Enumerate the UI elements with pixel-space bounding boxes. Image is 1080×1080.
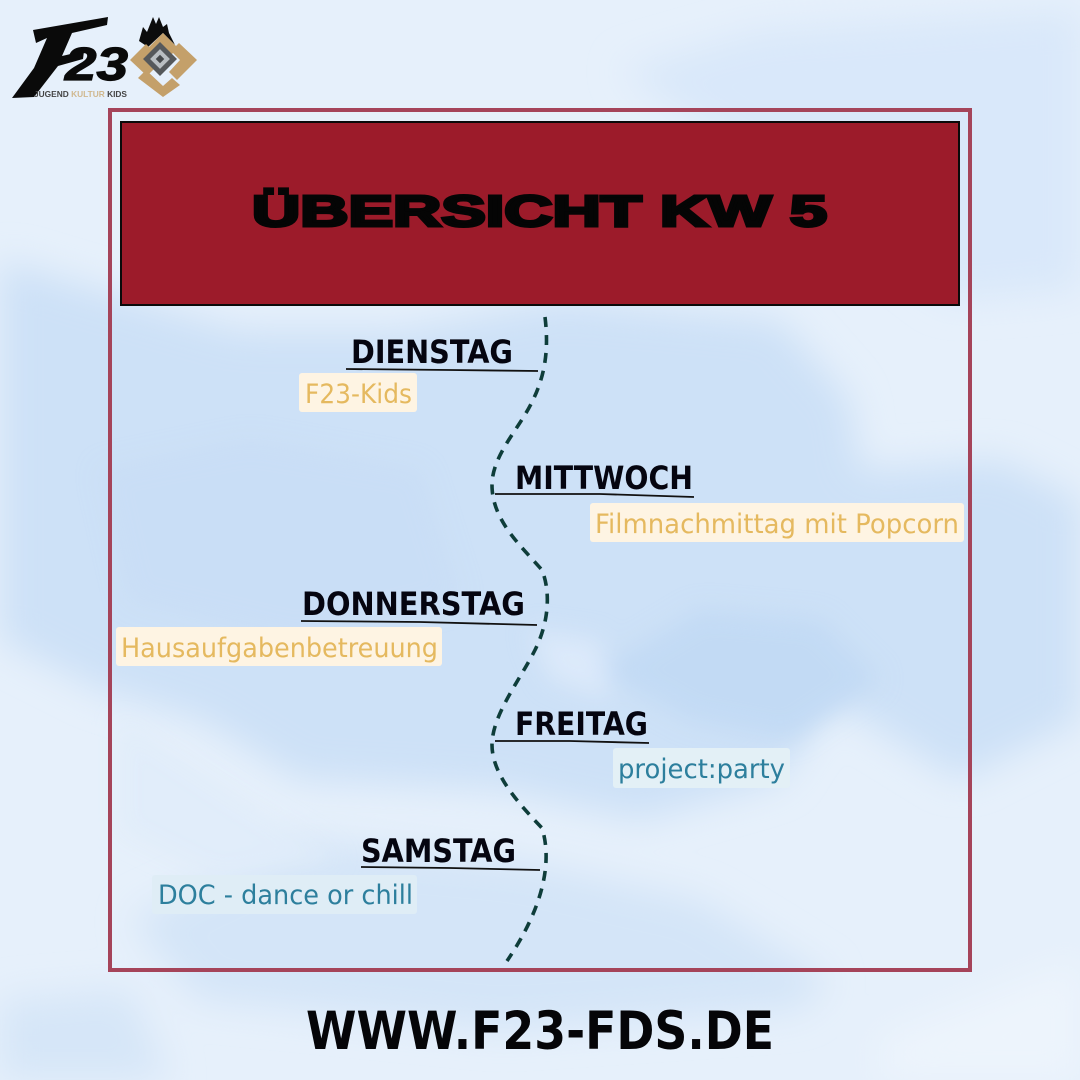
outer frame [110,110,970,970]
day heading: DIENSTAG [351,333,513,371]
entry: Donnerstag [116,585,537,666]
day heading: MITTWOCH [515,459,693,497]
connector line [495,741,649,743]
entry: Freitag [495,705,790,788]
entry: Dienstag [299,333,538,412]
logo numerals 23: 23 [64,38,129,90]
activity label: Filmnachmittag mit Popcorn [595,509,959,540]
logo: F23 Jugend Kultur Kids [12,17,197,99]
title: ÜBERSICHT KW 5 [252,187,827,236]
activity label: DOC - dance or chill [158,880,413,911]
logo tagline: JUGEND KULTUR KIDS [34,89,127,99]
day heading: FREITAG [515,705,648,743]
logo brush mark F [12,17,108,98]
day heading: DONNERSTAG [302,585,525,623]
header banner [121,122,959,305]
connector line [361,867,540,870]
activity label: F23-Kids [305,379,412,410]
logo emblem diamond [130,17,197,97]
connector line [346,369,538,371]
connector line [495,494,694,497]
activity label: Hausaufgabenbetreuung [121,633,438,664]
dashed timeline [492,317,547,961]
day heading: SAMSTAG [361,832,516,870]
activity label: project:party [618,754,785,785]
entry: Mittwoch [495,459,964,542]
entry: Samstag [152,832,540,914]
connector line [301,621,537,625]
website footer: WWW.F23-FDS.DE [306,1001,774,1062]
